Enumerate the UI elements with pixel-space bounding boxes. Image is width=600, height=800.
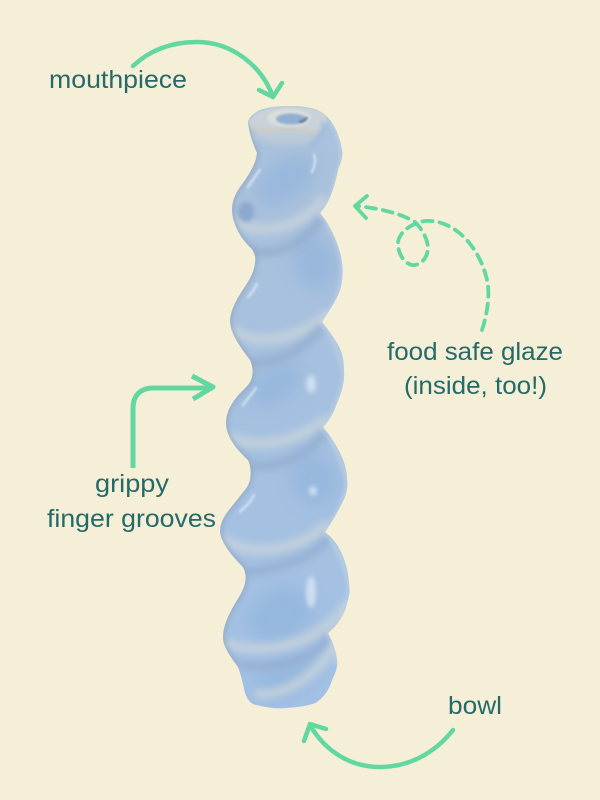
illustration: blue twisted ceramic pipe (220, 106, 350, 708)
arrow: grippy finger grooves (133, 376, 213, 468)
arrow: dashed with loop to glaze (355, 196, 488, 330)
neck shading under rim (252, 130, 316, 145)
label: grippy finger grooves (47, 470, 216, 533)
dark dimple (238, 202, 254, 222)
label: food safe glaze: (inside, too!) (404, 372, 547, 400)
label: grippy finger grooves: grippy (95, 470, 170, 498)
label: food safe glaze (387, 338, 563, 400)
label: bowl: bowl (448, 692, 502, 720)
swirl shadows (250, 155, 338, 686)
edge shading (220, 122, 257, 667)
arrow: mouthpiece (133, 42, 282, 97)
dark shadow creases (240, 218, 330, 666)
pale twist ridges (224, 200, 346, 694)
mouthpiece rim (248, 106, 328, 134)
mouthpiece opening (267, 109, 311, 127)
label: food safe glaze: food safe glaze (387, 338, 563, 366)
label: mouthpiece: mouthpiece (49, 66, 187, 94)
arrow: bowl (304, 724, 453, 767)
glossy highlights (240, 155, 315, 512)
label: grippy finger grooves: finger grooves (47, 505, 216, 533)
